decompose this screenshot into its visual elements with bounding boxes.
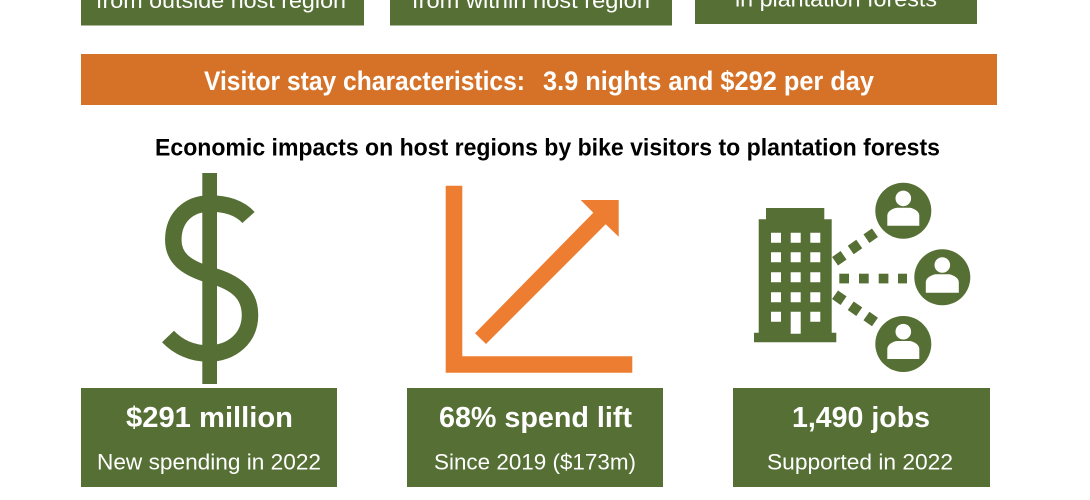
- stat card: new spending: New spending in 2022: [97, 450, 321, 474]
- icon: dollar sign: [168, 173, 250, 384]
- icon: building connected to people: [754, 183, 970, 372]
- banner: visitor stay characteristics: Visitor stay characteristics:: [204, 66, 525, 96]
- box: in plantation forests: [695, 0, 977, 24]
- box: visitors from within host region: [390, 0, 672, 26]
- heading: economic impacts: Economic impacts on host regions by bike visitors to plantation forests: [155, 134, 940, 162]
- person top: [875, 183, 931, 239]
- stat card: jobs: Supported in 2022: [767, 450, 953, 474]
- stat card: new spending: $291 million: [126, 402, 293, 434]
- stat card: spend lift: 68% spend lift: [439, 402, 633, 434]
- banner: visitor stay characteristics: 3.9 nights and $292 per day: [543, 66, 874, 96]
- person bottom: [875, 316, 931, 372]
- building: [754, 208, 836, 342]
- stat card: new spending: [81, 388, 337, 487]
- stat card: spend lift: Since 2019 ($173m): [434, 450, 636, 474]
- connector dots: [832, 228, 907, 326]
- banner: visitor stay characteristics: [81, 54, 997, 105]
- person middle: [914, 249, 970, 305]
- stat card: jobs: 1,490 jobs: [792, 402, 930, 434]
- icon: growth chart with arrow: [446, 186, 632, 373]
- stat card: spend lift: [407, 388, 663, 487]
- box: visitors from outside host region: [81, 0, 364, 26]
- stat card: jobs: [733, 388, 990, 487]
